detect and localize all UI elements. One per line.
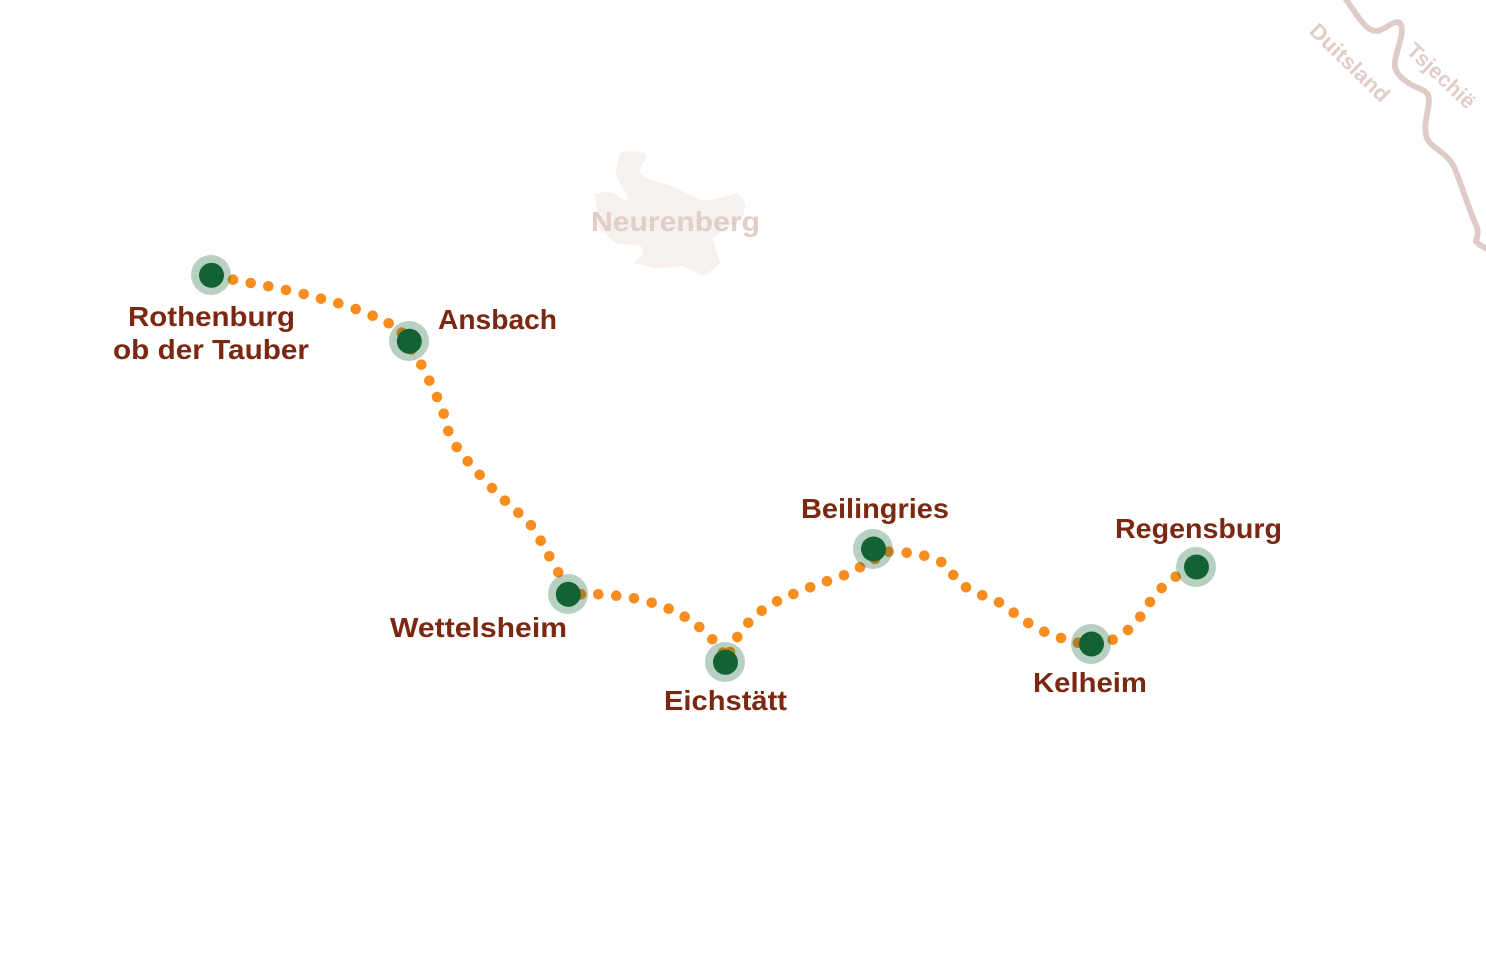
stop marker: Wettelsheim <box>548 574 588 614</box>
stop marker: Eichstätt <box>705 642 745 682</box>
dotted route line <box>210 271 1181 658</box>
stop marker: Ansbach <box>389 321 429 361</box>
stop marker: Kelheim <box>1071 624 1111 664</box>
city label: Rothenburg ob der Tauber: Rothenburg <box>128 301 295 332</box>
label: Neurenberg: Neurenberg <box>591 206 760 237</box>
city label: Kelheim: Kelheim <box>1033 667 1147 698</box>
city label: Beilingries: Beilingries <box>801 493 949 524</box>
area shape: Neurenberg <box>596 152 745 275</box>
city label: Wettelsheim: Wettelsheim <box>390 612 567 643</box>
city label: Eichstätt: Eichstätt <box>664 685 787 716</box>
label: Duitsland: Duitsland <box>1305 19 1395 107</box>
stop marker: Regensburg <box>1176 547 1216 587</box>
city label: Regensburg: Regensburg <box>1115 513 1282 544</box>
city label: Rothenburg ob der Tauber: ob der Tauber <box>113 334 309 365</box>
stop marker: Rothenburg ob der Tauber <box>191 255 231 295</box>
city label: Rothenburg ob der Tauber <box>113 301 309 365</box>
stop marker: Beilingries <box>853 529 893 569</box>
label: Tsjechië: Tsjechië <box>1402 38 1480 114</box>
city label: Ansbach: Ansbach <box>438 304 557 335</box>
country border <box>1345 0 1486 249</box>
